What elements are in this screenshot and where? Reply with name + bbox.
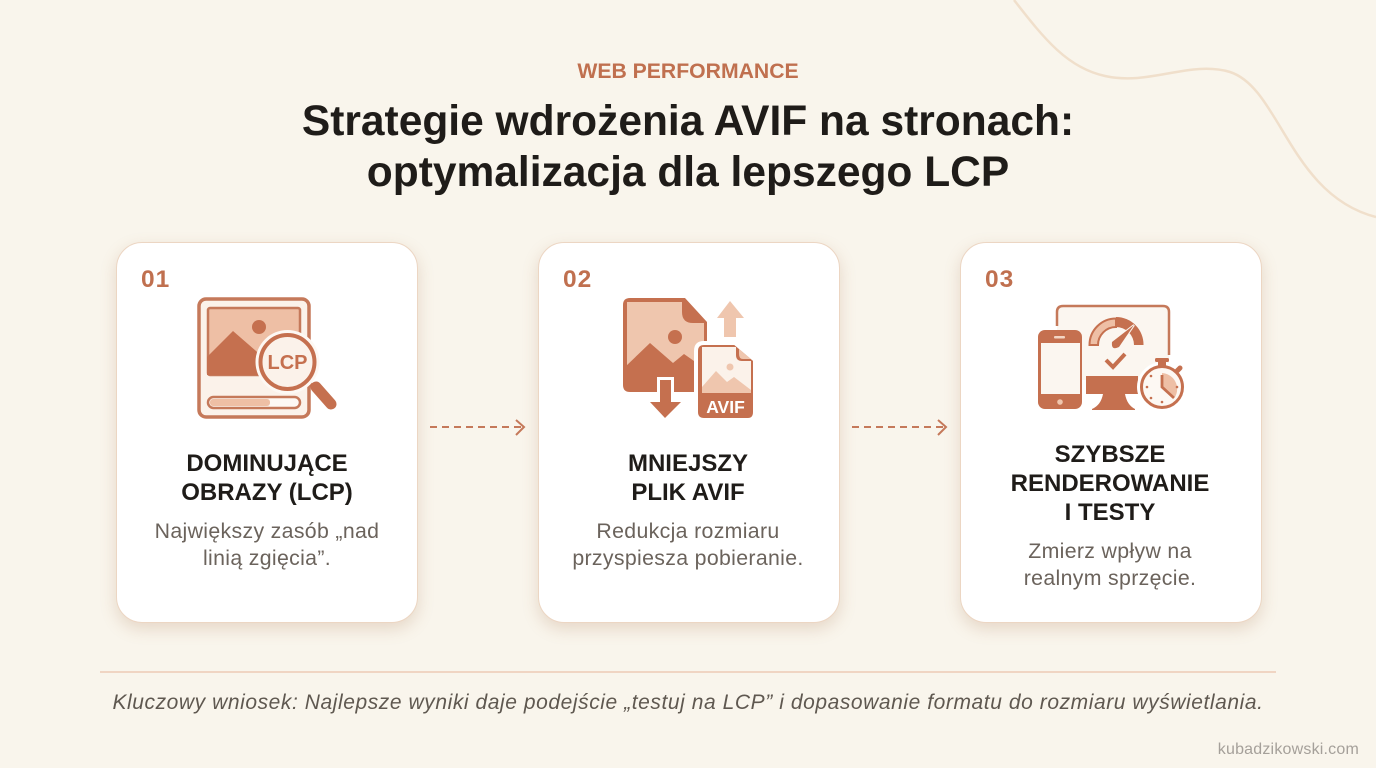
title: optymalizacja dla lepszego LCP — [367, 149, 1009, 196]
step 1 heading: OBRAZY (LCP) — [181, 479, 353, 506]
step 1 heading — [181, 450, 353, 506]
step 3 heading — [1011, 441, 1209, 526]
icon: smaller AVIF file — [623, 298, 753, 418]
step number 03: 03 — [985, 266, 1014, 293]
title — [302, 98, 1074, 196]
card 1 background — [116, 242, 418, 623]
step 2 heading: MNIEJSZY — [628, 450, 748, 477]
step number 02: 02 — [563, 266, 592, 293]
eyebrow label: WEB PERFORMANCE — [577, 60, 799, 83]
source credit: kubadzikowski.com — [1218, 741, 1359, 758]
step number 01: 01 — [141, 266, 170, 293]
card 3 background — [960, 242, 1262, 623]
step 2 description: Redukcja rozmiaru — [596, 519, 780, 543]
title: Strategie wdrożenia AVIF na stronach: — [302, 98, 1074, 145]
step 1 heading: DOMINUJĄCE — [186, 450, 348, 477]
icon: image with LCP magnifier: LCP — [268, 352, 308, 374]
step 2 heading — [628, 450, 748, 506]
step 1 description — [155, 519, 379, 570]
icon: devices, gauge and stopwatch — [1038, 304, 1184, 410]
step 2 heading: PLIK AVIF — [631, 479, 745, 506]
arrow: step 2 to 3 — [852, 419, 948, 436]
divider — [100, 671, 1276, 673]
icon: smaller AVIF file: AVIF — [706, 397, 745, 417]
key takeaway: Kluczowy wniosek: Najlepsze wyniki daje podejście „testuj na LCP” i dopasowanie formatu do rozmiaru wyświetlania. — [112, 691, 1264, 714]
panel: step 1 — [109, 241, 425, 636]
step 3 heading: RENDEROWANIE — [1011, 470, 1209, 497]
step 2 description: przyspiesza pobieranie. — [572, 546, 804, 570]
icon: image with LCP magnifier — [197, 297, 336, 419]
step 1 description: Największy zasób „nad — [155, 519, 379, 543]
step 3 heading: I TESTY — [1065, 499, 1155, 526]
card 2 background — [538, 242, 840, 623]
step 2 description — [572, 519, 804, 570]
step 3 heading: SZYBSZE — [1055, 441, 1165, 468]
step 3 description: realnym sprzęcie. — [1024, 566, 1196, 590]
step 1 description: linią zgięcia”. — [203, 546, 331, 570]
panel: step 2 — [531, 241, 847, 636]
step 3 description: Zmierz wpływ na — [1028, 539, 1192, 563]
step 3 description — [1024, 539, 1196, 590]
arrow: step 1 to 2 — [430, 419, 526, 436]
panel: step 3 — [953, 241, 1269, 636]
